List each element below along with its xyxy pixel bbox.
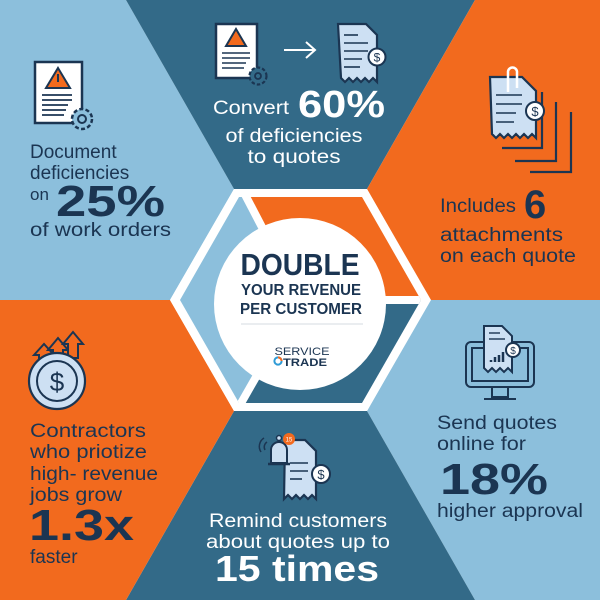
text: send quotes online 18% — [437, 413, 583, 522]
text: send quotes online 18%: Send quotes — [437, 413, 557, 434]
center title — [240, 247, 362, 318]
arrow — [284, 42, 315, 58]
icon: deficiency doc to quote (top) — [216, 24, 386, 84]
text: remind customers 15 times: Remind customers — [209, 511, 387, 532]
text: convert 60%: 60% — [298, 84, 385, 126]
text: document deficiencies: of work orders — [30, 220, 171, 241]
logo: servicetrade: SERVICE — [274, 346, 330, 358]
icon: monitor with quote (bottom-right) — [466, 326, 534, 399]
icon: deficiency doc to quote (top): $ — [374, 50, 381, 64]
panel: attachments (top-right) — [367, 0, 600, 300]
text: convert 60%: to quotes — [248, 147, 340, 168]
icon: coin with growth arrows (bottom-left): $ — [50, 367, 65, 397]
text: $ — [531, 104, 539, 119]
text: contractors 1.3x: who priotize — [29, 442, 147, 463]
text: includes 6 attachments: 6 — [524, 183, 546, 227]
text: includes 6 attachments: on each quote — [440, 246, 576, 267]
text: contractors 1.3x: Contractors — [30, 421, 146, 442]
text: remind customers 15 times: 15 times — [215, 548, 379, 589]
text: document deficiencies: on — [30, 185, 49, 204]
panel: convert deficiencies (top) — [126, 0, 475, 189]
text: document deficiencies: deficiencies — [30, 163, 129, 184]
icon: bell reminder with quote (bottom): $ — [317, 467, 325, 482]
text: includes 6 attachments — [440, 183, 576, 267]
panel: contractors (bottom-left) — [0, 300, 234, 600]
icon: bell reminder with quote (bottom) — [259, 433, 330, 499]
icon: coin with growth arrows (bottom-left) — [29, 332, 85, 409]
text: send quotes online 18%: higher approval — [437, 501, 583, 522]
logo: servicetrade: TRADE — [283, 357, 327, 369]
panel: send quotes online (bottom-right) — [367, 300, 600, 600]
center hexagon — [170, 189, 431, 411]
text: remind customers 15 times: about quotes up to — [206, 532, 390, 553]
icon: bell reminder with quote (bottom): 15 — [286, 438, 293, 444]
text: convert 60%: Convert — [213, 98, 290, 119]
center title: PER CUSTOMER — [240, 301, 362, 318]
text: contractors 1.3x: jobs grow — [29, 485, 122, 506]
text: send quotes online 18%: online for — [437, 434, 527, 455]
text: remind customers 15 times — [206, 511, 390, 589]
text: document deficiencies: Document — [30, 142, 117, 163]
icon: quote stack with paperclip (top-right) — [490, 68, 571, 172]
text: contractors 1.3x: high- revenue — [30, 464, 158, 485]
text: contractors 1.3x: 1.3x — [29, 501, 135, 550]
text: document deficiencies — [30, 142, 171, 241]
text: $ — [510, 346, 516, 357]
center title: DOUBLE — [240, 247, 360, 282]
text: contractors 1.3x: faster — [30, 547, 78, 568]
text: contractors 1.3x — [29, 421, 158, 568]
logo: servicetrade — [274, 346, 330, 369]
text: convert 60% — [213, 84, 385, 168]
text: includes 6 attachments: attachments — [440, 225, 563, 246]
text: includes 6 attachments: Includes — [440, 196, 516, 217]
icon: deficiency document with gear (top-left) — [35, 62, 92, 129]
text: document deficiencies: 25% — [56, 177, 165, 226]
panel: remind customers (bottom) — [126, 411, 475, 600]
center title: YOUR REVENUE — [241, 282, 361, 299]
panel: document deficiencies (top-left) — [0, 0, 234, 300]
text: send quotes online 18%: 18% — [440, 455, 548, 504]
text: convert 60%: of deficiencies — [226, 126, 362, 147]
